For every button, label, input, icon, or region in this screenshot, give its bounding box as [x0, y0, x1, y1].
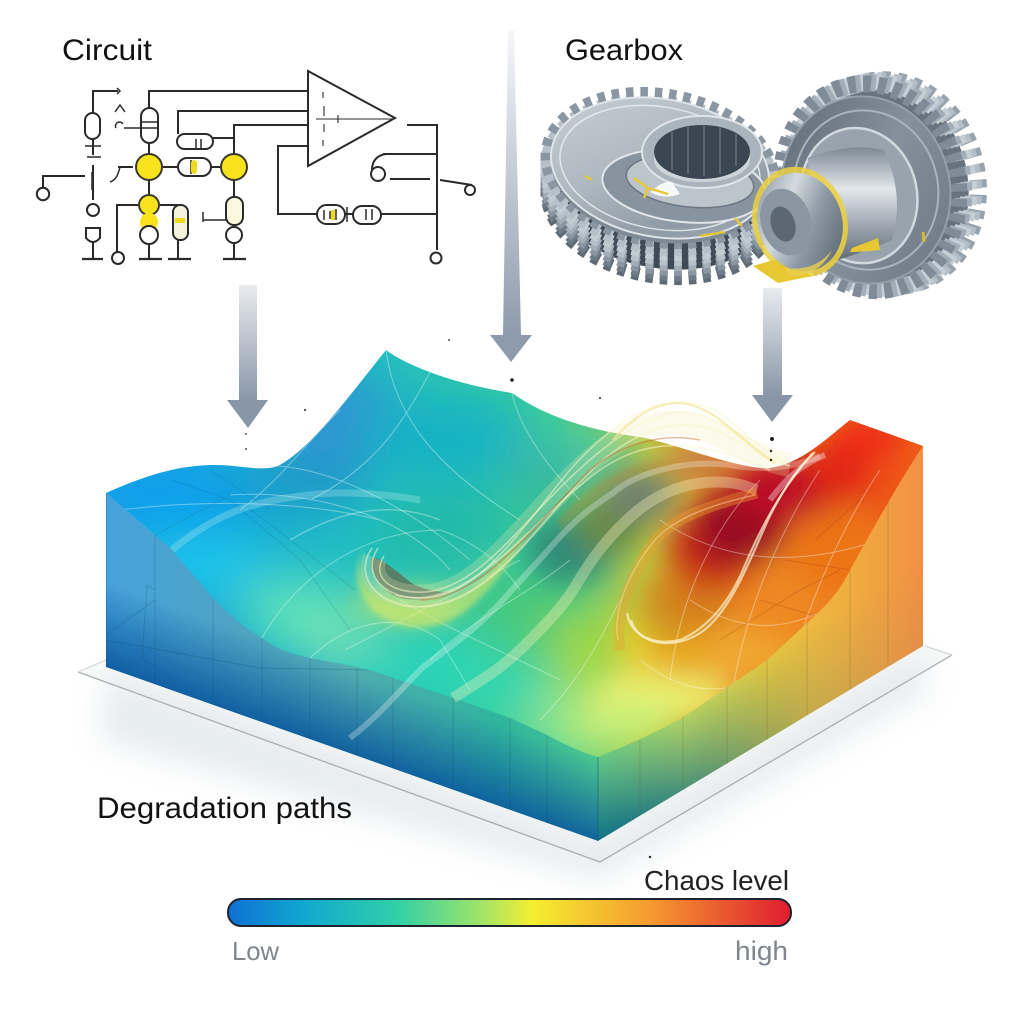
lower white coil [140, 226, 158, 244]
circuit schematic [37, 71, 475, 264]
label: Chaos level: Chaos level [644, 865, 789, 896]
right gear [762, 61, 998, 309]
resistor pills [85, 108, 381, 243]
mesh lines [120, 350, 880, 720]
bundle from hook [373, 423, 790, 597]
yellow lubricant halo [738, 154, 862, 290]
amplifier inner marks [316, 92, 392, 146]
strand shading [556, 462, 662, 528]
arrow: gearbox to surface [752, 288, 793, 422]
end disc on shaft [745, 161, 924, 283]
arrow: circuit to surface [227, 285, 268, 428]
left gear teeth [535, 76, 785, 296]
left gear hub [585, 116, 769, 236]
wiring [43, 91, 472, 259]
heading: Circuit: Circuit [62, 34, 153, 67]
small symbol details [85, 88, 372, 222]
upper arc [613, 403, 775, 463]
right gear face [764, 81, 968, 299]
orange arc band [619, 493, 757, 650]
floor shadow [100, 652, 930, 880]
ground bars [82, 258, 246, 260]
colour scale bar [228, 899, 791, 926]
arrow: centre to surface [490, 30, 532, 362]
surface colour field [106, 350, 923, 757]
chaos surface block [80, 339, 930, 858]
scale label: high: high [735, 936, 788, 966]
block side faces [106, 446, 923, 841]
degradation path strands [350, 402, 825, 738]
specks above surface [245, 339, 774, 858]
heading: Gearbox: Gearbox [565, 34, 683, 67]
large loop [627, 452, 815, 643]
label: Degradation paths: Degradation paths [97, 792, 352, 825]
terminals [37, 154, 475, 264]
right gear shaft [808, 147, 897, 266]
gearbox illustration [535, 61, 998, 309]
left gear face [540, 84, 780, 260]
hook hollow [357, 530, 530, 627]
scale label: Low: Low [232, 936, 279, 966]
yellow accents [175, 160, 335, 223]
second and third bands [350, 456, 820, 738]
yellow nodes [136, 154, 247, 231]
amplifier triangle [308, 71, 395, 166]
floor plane [78, 646, 952, 880]
